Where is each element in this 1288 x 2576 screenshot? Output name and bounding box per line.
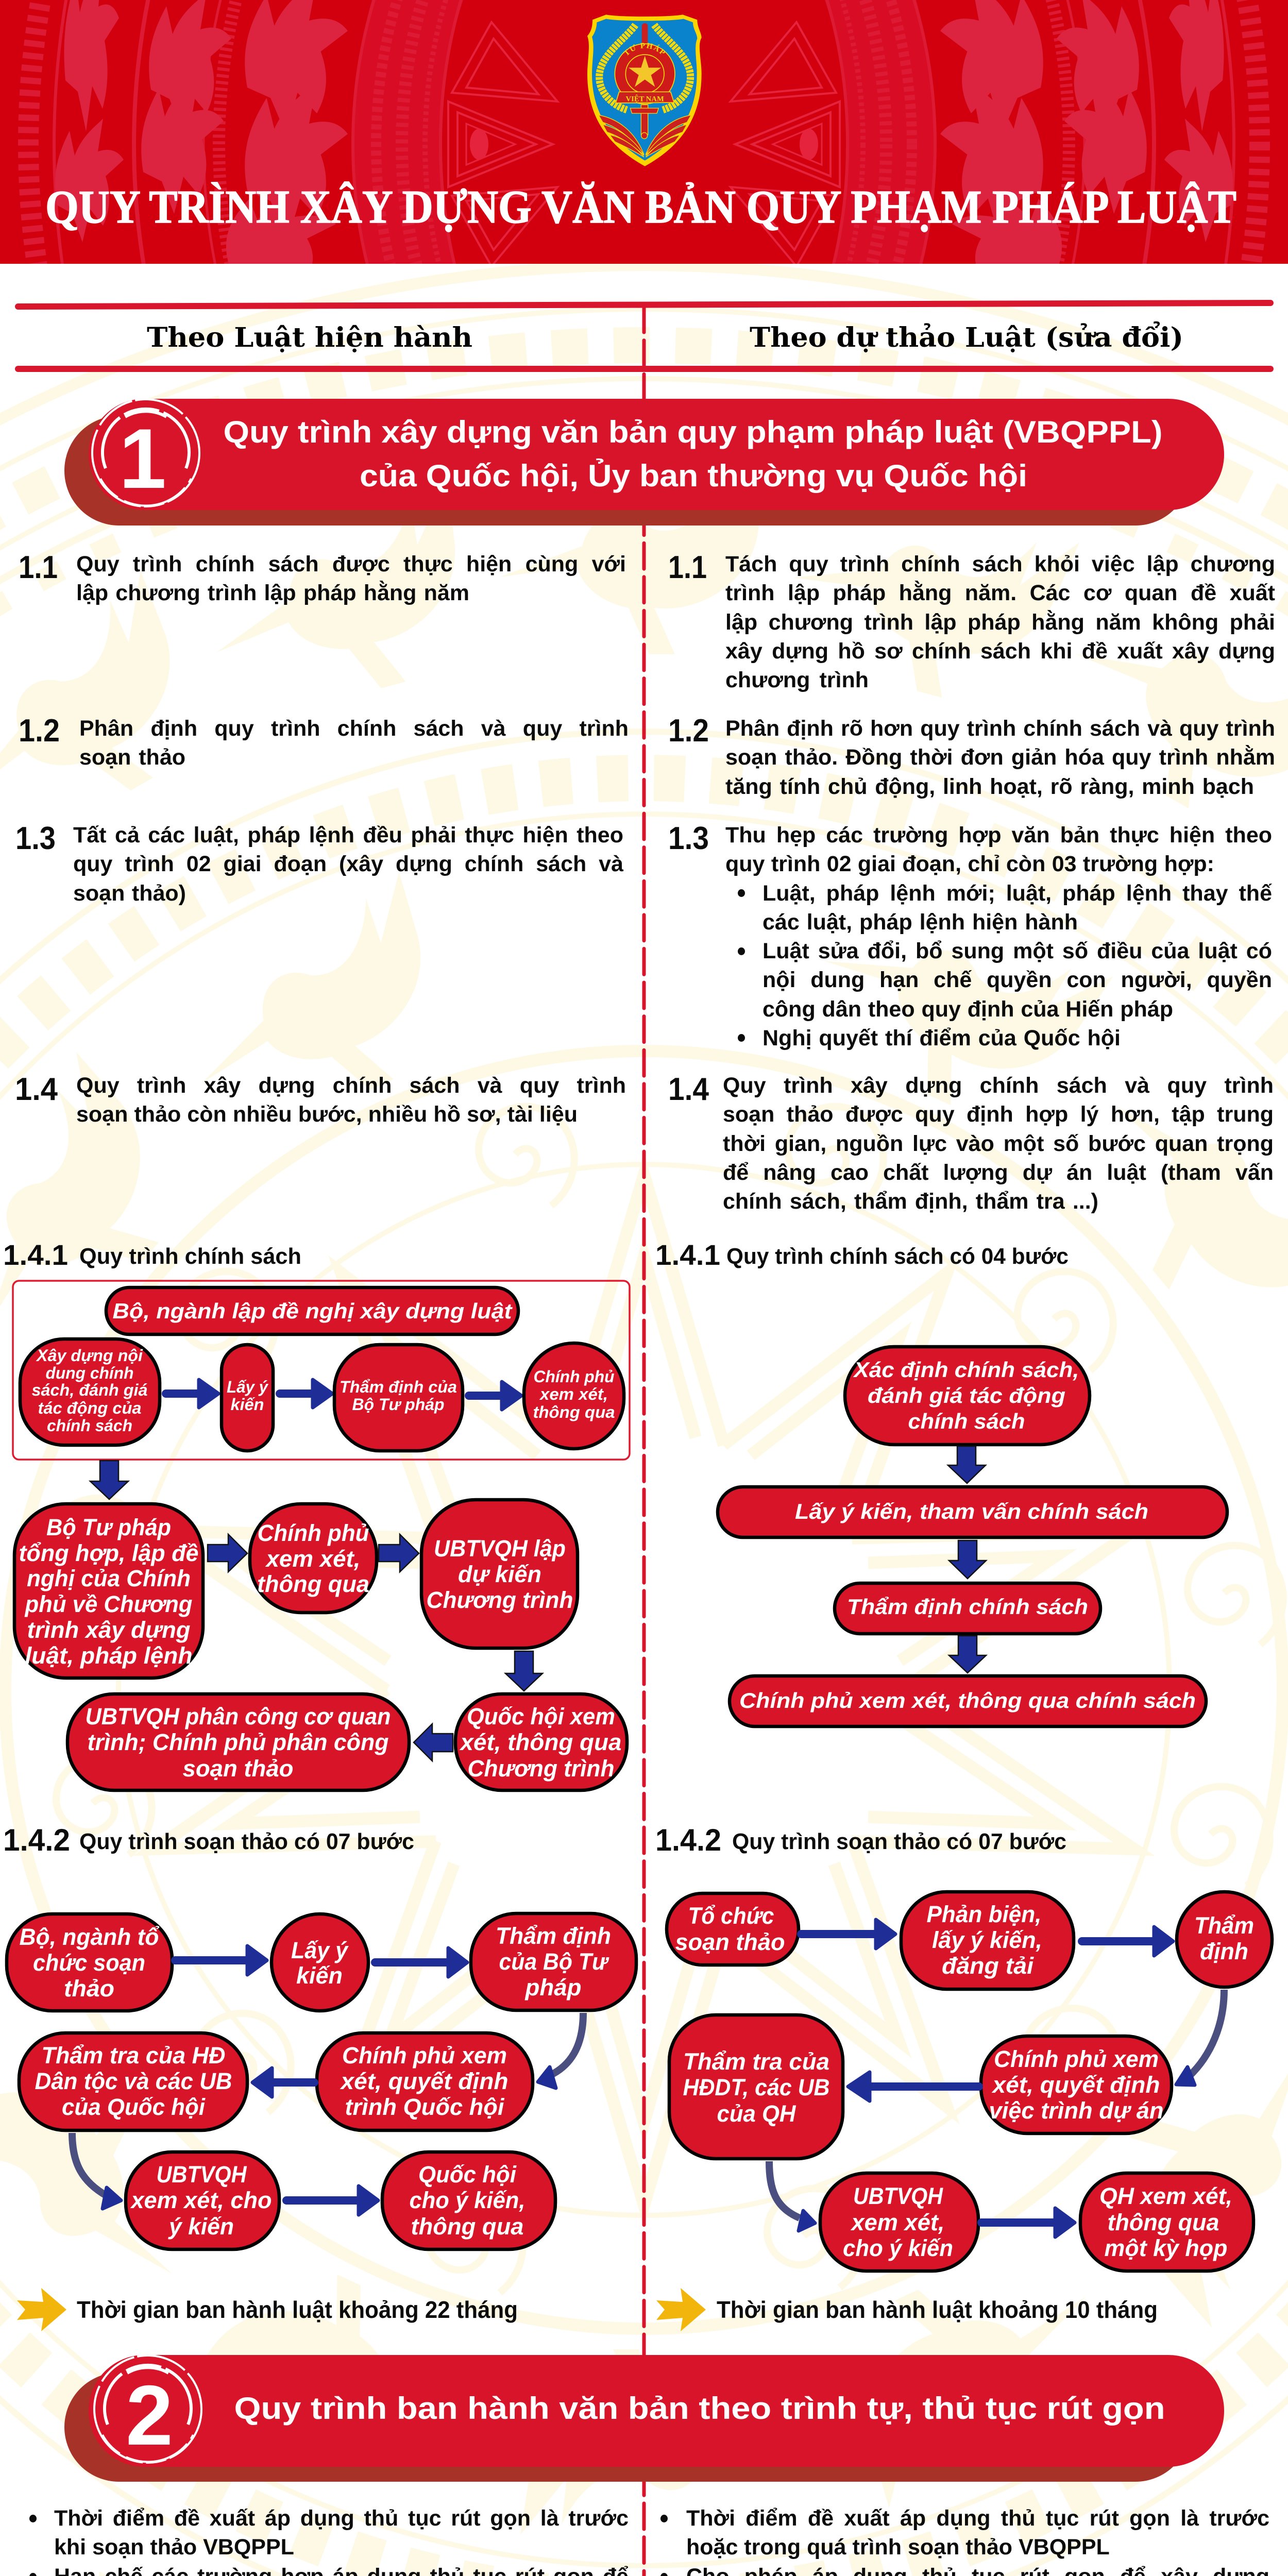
node: verification: của QH (717, 2100, 796, 2127)
node: NASC opinion: cho ý kiến (843, 2235, 953, 2261)
node: National Assembly approves: xét, thông qua (459, 1729, 621, 1755)
text 1.4 left (76, 1073, 626, 1127)
node: Ministry of Justice summary: nghị của Chính (27, 1565, 191, 1591)
item numbers, left column: 1.4 (15, 1072, 58, 1107)
node: organise drafting: chức soạn (33, 1950, 145, 1976)
text 1.4 right: thời gian, nguồn lực vào một số bước quan trọng (723, 1131, 1274, 1156)
node: National Assembly: thông qua (1108, 2209, 1219, 2235)
heading 1.4.1 left: Quy trình chính sách (79, 1244, 301, 1269)
node: build policy content: Xây dựng nội (36, 1346, 143, 1365)
node: organise drafting (667, 1893, 799, 1965)
item numbers, left column: 1.3 (15, 821, 56, 856)
node: government review: thông qua (533, 1403, 615, 1421)
node: MoJ appraisal (471, 1913, 636, 2010)
node: Ministry of Justice summary: trình xây dựng (27, 1617, 190, 1643)
node: NASC opinion (126, 2152, 279, 2249)
node: government decides: Chính phủ xem (994, 2046, 1159, 2072)
node: NASC drafts programme: Chương trình (427, 1587, 573, 1613)
text 1.4 right: để nâng cao chất lượng dự án luật (tham vấn (723, 1160, 1274, 1185)
curved arrow (538, 2013, 583, 2088)
arrow (1082, 1927, 1173, 1956)
arrow (252, 2068, 314, 2097)
node: organise drafting: Tổ chức (688, 1903, 774, 1929)
node: NASC assigns: UBTVQH phân công cơ quan (86, 1703, 391, 1730)
node: government review (524, 1343, 624, 1449)
arrow (175, 1946, 267, 1975)
node: verification (19, 2033, 247, 2130)
heading 1.4.2 left (3, 1823, 414, 1857)
node: Ministry of Justice summary: Bộ Tư pháp (46, 1514, 171, 1540)
text 1.4 left: soạn thảo còn nhiều bước, nhiều hồ sơ, tài liệu (76, 1102, 578, 1127)
node: National Assembly (382, 2152, 555, 2249)
arrow (375, 1948, 467, 1977)
node: NASC assigns (67, 1694, 409, 1790)
block arrow down (90, 1461, 128, 1499)
node: verification: Thẩm tra của HĐ (41, 2042, 226, 2069)
item numbers, left column: 1.2 (19, 713, 60, 749)
arrow (848, 2072, 979, 2101)
node: NASC assigns: soạn thảo (182, 1755, 294, 1782)
node: critique (901, 1892, 1074, 1989)
node: government decides: Chính phủ xem (342, 2042, 507, 2069)
text 1.3 left: quy trình 02 giai đoạn (xây dựng chính sách và (73, 852, 623, 876)
text 1.2 left: Phân định quy trình chính sách và quy trình (79, 716, 629, 741)
curved arrow (72, 2133, 121, 2209)
section banner 1 (64, 399, 1224, 526)
emblem: Tư pháp shield (587, 14, 702, 166)
node: verification: của Quốc hội (62, 2094, 206, 2120)
node: consult (718, 1487, 1227, 1537)
arrow (166, 1380, 218, 1408)
curved arrow (769, 2161, 815, 2231)
text 1.3 left (73, 823, 623, 906)
text 1.3 right with bullets: Luật sửa đổi, bổ sung một số điều của luật có (762, 939, 1272, 963)
item numbers, right column: 1.3 (668, 821, 709, 856)
node: MoJ appraisal: Thẩm định (496, 1923, 611, 1949)
node: consult: Lấy ý (291, 1937, 349, 1963)
node: NASC assigns: trình; Chính phủ phân công (88, 1729, 388, 1755)
section banner 1: 1 (119, 411, 166, 506)
node: appraisal: Thẩm định chính sách (847, 1595, 1088, 1619)
text 1.4 right: chính sách, thẩm định, thẩm tra ...) (723, 1189, 1098, 1214)
node: verification: HĐDT, các UB (683, 2074, 829, 2100)
arrow (981, 2208, 1075, 2237)
callout: 22 months (17, 2288, 518, 2331)
text 1.3 right with bullets: Thu hẹp các trường hợp văn bản thực hiện theo (725, 823, 1272, 848)
text 1.1 right: xây dựng hồ sơ chính sách khi đề xuất xây dựng (725, 639, 1275, 664)
text 1.2 right: soạn thảo. Đồng thời đơn giản hóa quy trình nhằm (725, 745, 1275, 770)
node: National Assembly: một kỳ họp (1105, 2235, 1227, 2261)
header band with emblem and title (0, 0, 1288, 264)
node: critique: Phản biện, (926, 1901, 1042, 1927)
flowchart: current policy process (13, 1281, 630, 1790)
arrow (469, 1382, 521, 1410)
node: consult: kiến (231, 1395, 264, 1414)
flowchart: draft drafting process (667, 1892, 1272, 2271)
node: proposal (106, 1287, 518, 1334)
heading 1.4.2 right: Quy trình soạn thảo có 07 bước (732, 1829, 1066, 1854)
node: government decides: trình Quốc hội (345, 2094, 505, 2120)
node: organise drafting: soạn thảo (675, 1929, 785, 1955)
heading 1.4.1 left (3, 1239, 301, 1271)
section banner 1: của Quốc hội, Ủy ban thường vụ Quốc hội (360, 459, 1027, 493)
node: organise drafting: thảo (64, 1975, 114, 2002)
section 2 bullets left (29, 2506, 629, 2576)
node: NASC opinion: ý kiến (168, 2213, 234, 2240)
node: government decides: xét, quyết định (340, 2068, 508, 2094)
node: National Assembly: thông qua (411, 2213, 523, 2240)
block arrow down (949, 1636, 986, 1673)
node: build policy content (20, 1339, 160, 1445)
node: Ministry of Justice summary (14, 1504, 203, 1678)
text 1.1 right: Tách quy trình chính sách khỏi việc lập chương (725, 552, 1275, 577)
heading 1.4.1 right (655, 1239, 1069, 1271)
node: appraisal (835, 1583, 1100, 1634)
node: National Assembly approves (455, 1694, 627, 1790)
vertical dashed divider (642, 307, 646, 2576)
arrow (286, 2186, 378, 2215)
text 1.4 right (723, 1073, 1274, 1214)
text 1.3 right with bullets: nội dung hạn chế quyền con người, quyền (762, 968, 1272, 992)
node: build policy content: tác động của (38, 1399, 141, 1417)
text 1.2 right (725, 716, 1275, 799)
text 1.3 right with bullets: Nghị quyết thí điểm của Quốc hội (762, 1026, 1121, 1050)
node: NASC opinion: xem xét, (850, 2209, 945, 2235)
text 1.4 right: Quy trình xây dựng chính sách và quy trình (723, 1073, 1274, 1098)
node: National Assembly approves: Chương trình (468, 1755, 614, 1782)
section banner 2: 2 (126, 2368, 173, 2463)
section 2 bullets left: khi soạn thảo VBQPPL (54, 2535, 294, 2560)
heading 1.4.2 left: Quy trình soạn thảo có 07 bước (79, 1829, 414, 1854)
node: build policy content: dung chính (45, 1364, 134, 1382)
text 1.3 right with bullets: công dân theo quy định của Hiến pháp (762, 997, 1173, 1022)
section 2 bullets right: hoặc trong quá trình soạn thảo VBQPPL (686, 2535, 1110, 2560)
node: organise drafting: Bộ, ngành tổ (20, 1924, 160, 1950)
section banner 2 (64, 2355, 1224, 2482)
text 1.4 left: Quy trình xây dựng chính sách và quy trình (76, 1073, 626, 1098)
heading 1.4.2 right (655, 1823, 1066, 1857)
node: define policy: chính sách (908, 1409, 1025, 1433)
node: verification (669, 2015, 843, 2159)
node: government decides (981, 2036, 1172, 2133)
node: government decides: việc trình dự án (989, 2097, 1163, 2124)
heading 1.4.2 right: 1.4.2 (655, 1823, 721, 1857)
text 1.3 left: Tất cả các luật, pháp lệnh đều phải thực hiện theo (73, 823, 623, 848)
arrow (280, 1380, 332, 1408)
node: critique: lấy ý kiến, (932, 1927, 1042, 1953)
block arrow right (379, 1534, 419, 1572)
node: NASC opinion: xem xét, cho (130, 2187, 272, 2213)
node: National Assembly (1080, 2173, 1253, 2271)
section 2 bullets right: Thời điểm đề xuất áp dụng thủ tục rút gọn là trước (686, 2506, 1269, 2531)
heading 1.4.2 left: 1.4.2 (3, 1823, 70, 1857)
node: define policy: Xác định chính sách, (853, 1358, 1079, 1382)
node: appraisal: định (1200, 1938, 1248, 1964)
text 1.3 right with bullets: các luật, pháp lệnh hiện hành (762, 910, 1078, 935)
heading 1.4.1 left: 1.4.1 (3, 1239, 68, 1271)
node: National Assembly: Quốc hội (418, 2161, 517, 2188)
item numbers, right column: 1.2 (668, 713, 709, 749)
item numbers, left column (15, 550, 60, 1107)
node: appraisal: Thẩm (1194, 1912, 1254, 1939)
section banner 1: Quy trình xây dựng văn bản quy phạm pháp luật (VBQPPL) (224, 415, 1162, 449)
text 1.3 right with bullets: Luật, pháp lệnh mới; luật, pháp lệnh thay thế (762, 881, 1272, 906)
text 1.2 left: soạn thảo (79, 745, 185, 770)
node: define policy (845, 1347, 1090, 1445)
node: government review: xem xét, (539, 1385, 608, 1403)
node: consult: kiến (296, 1962, 343, 1989)
text 1.2 left (79, 716, 629, 770)
node: build policy content: chính sách (47, 1416, 132, 1435)
node: Ministry of Justice summary: tổng hợp, lập đề (19, 1540, 199, 1566)
node: government decides: xét, quyết định (991, 2072, 1160, 2098)
block arrow down (948, 1446, 986, 1483)
header pattern: drum motifs (28, 0, 1260, 866)
text 1.2 right: tăng tính chủ động, linh hoạt, rõ ràng, minh bạch (725, 774, 1254, 799)
node: government approves policy (730, 1676, 1206, 1726)
text 1.1 left (76, 552, 626, 605)
text 1.1 right: trình lập pháp hằng năm. Các cơ quan đề xuất (725, 581, 1275, 605)
block arrow down (505, 1651, 543, 1691)
block arrow down (949, 1540, 986, 1579)
callout: 10 months: Thời gian ban hành luật khoảng 10 tháng (717, 2296, 1158, 2323)
node: National Assembly approves: Quốc hội xem (467, 1703, 615, 1730)
text 1.2 right: Phân định rõ hơn quy trình chính sách và quy trình (725, 716, 1275, 741)
node: NASC opinion: UBTVQH (157, 2161, 247, 2188)
node: organise drafting (7, 1914, 172, 2011)
section 2 bullets right (660, 2506, 1269, 2576)
column heading rule: top (18, 303, 1270, 307)
column heading: draft law: Theo dự thảo Luật (sửa đổi) (750, 321, 1183, 353)
text 1.4 right: soạn thảo được quy định hợp lý hơn, tập trung (723, 1102, 1274, 1127)
callout: 22 months: Thời gian ban hành luật khoảng 22 tháng (77, 2296, 518, 2323)
node: NASC drafts programme: UBTVQH lập (434, 1535, 566, 1562)
item numbers, right column: 1.4 (668, 1072, 709, 1107)
red frame grouping first steps (13, 1281, 630, 1460)
node: appraisal (334, 1345, 463, 1451)
node: consult (272, 1914, 368, 2011)
node: build policy content: sách, đánh giá (32, 1381, 147, 1399)
node: Ministry of Justice summary: phủ về Chương (25, 1591, 192, 1617)
block arrow right (208, 1534, 247, 1572)
flowchart: current drafting process (7, 1913, 636, 2249)
node: government approves (250, 1504, 377, 1613)
text 1.3 right with bullets: quy trình 02 giai đoạn, chỉ còn 03 trường hợp: (725, 852, 1214, 876)
node: MoJ appraisal: pháp (524, 1974, 581, 2001)
node: government approves policy: Chính phủ xem xét, thông qua chính sách (739, 1688, 1196, 1713)
node: government approves: thông qua (257, 1571, 369, 1597)
node: NASC opinion: UBTVQH (853, 2183, 943, 2209)
item numbers, left column: 1.1 (19, 550, 58, 585)
node: define policy: đánh giá tác động (868, 1383, 1065, 1408)
column heading: current law: Theo Luật hiện hành (147, 322, 472, 353)
node: government review: Chính phủ (534, 1367, 614, 1386)
node: appraisal: Thẩm định của (340, 1378, 457, 1396)
node: government approves: xem xét, (265, 1546, 361, 1572)
block arrow left (414, 1724, 453, 1761)
node: proposal: Bộ, ngành lập đề nghị xây dựng luật (112, 1299, 513, 1323)
text 1.1 left: lập chương trình lập pháp hằng năm (76, 581, 469, 605)
node: government approves: Chính phủ (258, 1520, 369, 1546)
column heading rule: bottom (18, 366, 1270, 372)
text 1.1 right: lập chương trình lập pháp hằng năm không phải (725, 610, 1275, 635)
item numbers, right column (668, 550, 709, 1107)
node: Ministry of Justice summary: luật, pháp lệnh (25, 1642, 193, 1669)
node: verification: Dân tộc và các UB (35, 2068, 232, 2094)
emblem: Tư pháp shield: TƯ PHÁP (623, 43, 665, 56)
heading 1.4.1 right: 1.4.1 (655, 1239, 720, 1271)
flowchart: draft policy process (718, 1347, 1227, 1726)
text 1.3 right with bullets (725, 823, 1273, 1050)
heading 1.4.1 right: Quy trình chính sách có 04 bước (726, 1244, 1069, 1269)
node: critique: đăng tải (942, 1953, 1035, 1979)
node: appraisal (1177, 1892, 1272, 1987)
callout: 10 months (656, 2288, 1158, 2331)
text 1.1 right (725, 552, 1275, 692)
node: verification: Thẩm tra của (683, 2048, 829, 2075)
node: NASC drafts programme: dự kiến (458, 1561, 541, 1587)
text 1.1 left: Quy trình chính sách được thực hiện cùng với (76, 552, 626, 577)
arrow (801, 1920, 895, 1948)
node: NASC drafts programme (421, 1500, 578, 1648)
node: appraisal: Bộ Tư pháp (352, 1395, 444, 1414)
node: MoJ appraisal: của Bộ Tư (499, 1948, 609, 1975)
node: consult (222, 1345, 273, 1451)
section 2 bullets left: Thời điểm đề xuất áp dụng thủ tục rút gọn là trước (54, 2506, 629, 2531)
emblem: Tư pháp shield: VIỆT NAM (626, 95, 664, 104)
node: National Assembly: QH xem xét, (1099, 2183, 1232, 2209)
node: NASC opinion (820, 2173, 978, 2271)
node: National Assembly: cho ý kiến, (409, 2187, 526, 2213)
item numbers, right column: 1.1 (668, 550, 707, 585)
node: government decides (317, 2033, 533, 2130)
node: consult: Lấy ý (227, 1378, 269, 1396)
text 1.1 right: chương trình (725, 668, 869, 692)
curved arrow (1176, 1990, 1224, 2085)
node: consult: Lấy ý kiến, tham vấn chính sách (795, 1499, 1148, 1523)
text 1.3 left: soạn thảo) (73, 881, 186, 906)
section banner 2: Quy trình ban hành văn bản theo trình tự, thủ tục rút gọn (234, 2391, 1165, 2426)
